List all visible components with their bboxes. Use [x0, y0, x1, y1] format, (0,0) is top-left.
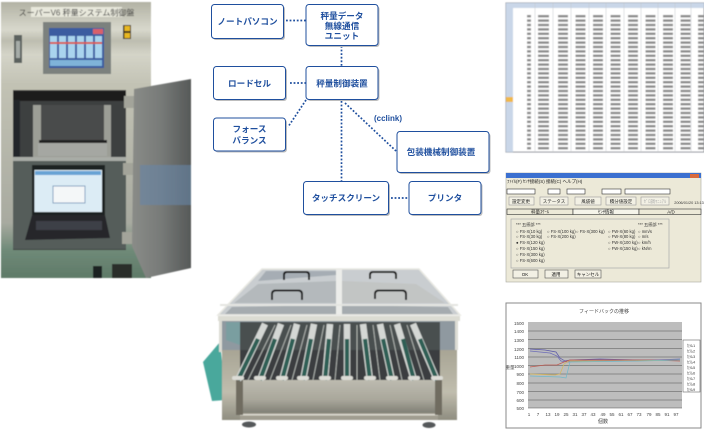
- chart legend: [683, 340, 700, 392]
- screenshot: settings window: A/D: [667, 210, 675, 215]
- cabinet switches: [93, 264, 132, 278]
- box: タッチスクリーン: [304, 182, 390, 216]
- screenshot: settings window: ｾﾝｻ情報: [598, 209, 614, 216]
- cabinet opening: [13, 90, 126, 250]
- screenshot: settings window: *** 五感部 ***: [638, 221, 663, 228]
- machine body: [222, 350, 457, 420]
- box: 秤量制御装置: [306, 66, 380, 101]
- screenshot: settings window: ○ km/h: [638, 240, 651, 245]
- chart plot area: [528, 322, 682, 408]
- window title bar: [506, 173, 701, 178]
- screenshot: settings window: ○ FW-X(60 kg): [608, 229, 636, 234]
- screenshot: settings window: ○ FS-X(600 kg): [516, 258, 545, 263]
- chart x axis labels: 73: [636, 412, 642, 417]
- chart legend: ｶﾗﾑ9: [687, 387, 696, 392]
- machine handles: [272, 272, 406, 300]
- window buttons: [509, 197, 669, 205]
- window tabs: [507, 209, 701, 214]
- connector lines: [286, 20, 409, 198]
- spreadsheet cells: [557, 14, 704, 151]
- chart x axis labels: [528, 412, 679, 417]
- chart: feedback trend: 重量: [506, 364, 515, 371]
- chart y axis labels: 1100: [514, 355, 524, 360]
- chart x axis labels: 7: [537, 412, 540, 417]
- screenshot: settings window: ○ FS-X(10 kg): [516, 229, 543, 234]
- chart y axis labels: 1200: [514, 347, 524, 352]
- screenshot: settings window: ○ m/s: [638, 234, 648, 239]
- photo: weighing machine: [203, 269, 460, 428]
- label: cclink: (cclink): [374, 114, 402, 123]
- screenshot: settings window: ○ kN/m: [638, 246, 652, 251]
- screenshot: settings window: ステータス: [543, 198, 566, 205]
- chart y axis labels: 800: [516, 381, 524, 386]
- screenshot: settings window: 秤量ｽｹｰﾙ: [531, 209, 550, 216]
- screenshot: settings window: 設定変更: [512, 198, 530, 205]
- chart: feedback trend: [506, 303, 701, 428]
- spreadsheet header: [506, 3, 704, 8]
- chart y axis labels: 600: [516, 398, 524, 403]
- chart legend: ｶﾗﾑ8: [687, 382, 696, 386]
- photo: control cabinet: [1, 2, 191, 278]
- box: 包装機械制御装置: 包装機械制御装置: [407, 146, 476, 157]
- box: ノートパソコン: [212, 4, 285, 40]
- chart legend: ｶﾗﾑ5: [687, 365, 696, 370]
- chart y axis labels: 500: [516, 406, 524, 411]
- box: ノートパソコン: ノートパソコン: [217, 16, 278, 26]
- screenshot: settings window: キャンセル: [577, 272, 600, 277]
- screenshot: settings window: ○ FS-X(30 kg): [516, 234, 543, 239]
- chart x axis labels: 19: [554, 412, 560, 417]
- chart legend: ｶﾗﾑ6: [687, 370, 696, 376]
- chart y axis labels: 1000: [514, 364, 524, 369]
- chart x axis labels: 49: [600, 412, 606, 417]
- screenshot: settings window: ○ FW-X(100 kg): [608, 240, 638, 245]
- box: 秤量制御装置: 秤量制御装置: [316, 78, 368, 88]
- door hinges: [122, 96, 136, 244]
- box: フォースバランス: [214, 118, 287, 152]
- screenshot: settings window: 風袋値: [581, 198, 595, 205]
- cabinet touch panel: [43, 22, 111, 74]
- box: 秤量データ無線通信ユニット: 無線通信: [325, 20, 360, 31]
- box: フォースバランス: フォース: [233, 124, 266, 134]
- chart x axis labels: 37: [581, 412, 587, 417]
- chart y axis labels: 900: [516, 372, 524, 377]
- machine glass cover: [218, 269, 460, 352]
- window group box: [511, 219, 669, 268]
- window bottom buttons: [513, 270, 601, 278]
- box: プリンタ: プリンタ: [428, 192, 462, 203]
- box: ロードセル: ロードセル: [228, 78, 271, 88]
- chart x axis labels: 97: [673, 412, 679, 417]
- chart x axis labels: 13: [545, 412, 551, 417]
- chart data lines: [530, 349, 680, 378]
- chart x axis labels: 79: [646, 412, 652, 417]
- box: 秤量データ無線通信ユニット: ユニット: [325, 31, 359, 41]
- screenshot: settings window: OK: [522, 272, 528, 277]
- chart title: フィードバックの推移: [579, 308, 629, 315]
- box: 包装機械制御装置: [397, 132, 490, 174]
- chart legend: ｶﾗﾑ7: [687, 376, 696, 381]
- screenshot: settings window: 2006/01/20 13:13: [674, 201, 704, 205]
- chart x axis labels: 55: [609, 412, 615, 417]
- box: フォースバランス: バランス: [232, 136, 267, 146]
- cabinet body: [1, 2, 151, 278]
- box: ロードセル: [214, 66, 287, 101]
- chart x axis labels: 25: [563, 412, 569, 417]
- screenshot: settings window: ○ FS-X(300 kg): [576, 229, 605, 234]
- machine conveyor ends: [232, 376, 443, 380]
- chart x axis labels: 1: [528, 412, 531, 417]
- chart axis titles: 個数: [598, 418, 608, 425]
- box: タッチスクリーン: タッチスクリーン: [312, 192, 381, 203]
- screenshot: spreadsheet: [506, 3, 704, 152]
- cabinet door: [132, 79, 191, 278]
- chart y axis labels: 1400: [514, 329, 524, 334]
- chart legend: ｶﾗﾑ1: [687, 343, 696, 348]
- cabinet lamps: [123, 25, 131, 39]
- screenshot: settings window: [506, 173, 704, 282]
- chart x axis labels: 67: [627, 412, 633, 417]
- screenshot: settings window: ○ FS-X(150 kg): [516, 246, 545, 251]
- chart x axis labels: 31: [572, 412, 578, 417]
- screenshot: settings window: 積分値設定: [610, 198, 633, 205]
- screenshot: settings window: ○ FW-X(80 kg): [608, 234, 636, 239]
- printer: [38, 105, 107, 156]
- chart y axis labels: 1300: [514, 338, 524, 343]
- chart x axis labels: 85: [655, 412, 661, 417]
- screenshot: settings window: ○ FW-X(150 kg): [608, 246, 638, 251]
- chart y axis labels: [514, 321, 524, 411]
- screenshot: settings window: ○ mm/s: [638, 229, 652, 234]
- chart x axis labels: 91: [664, 412, 670, 417]
- system diagram: [212, 4, 490, 216]
- chart legend: ｶﾗﾑ4: [687, 360, 696, 364]
- box: プリンタ: [409, 182, 482, 216]
- machine conveyors: [238, 324, 437, 380]
- chart y axis labels: 700: [516, 390, 524, 395]
- screenshot: settings window: ｾﾞﾛ調ﾏﾆｭｱﾙ: [644, 198, 667, 205]
- chart x axis labels: 43: [590, 412, 596, 417]
- box: 秤量データ無線通信ユニット: 秤量データ: [321, 10, 363, 21]
- screenshot: settings window: ○ FS-X(300 kg): [516, 252, 545, 257]
- chart y axis labels: 1500: [514, 321, 524, 326]
- screenshot: settings window: 適用: [552, 271, 560, 278]
- chart legend: ｶﾗﾑ3: [687, 354, 696, 359]
- window menu: ﾌｧｲﾙ(F) ｾﾝｻ接続(S) 接続(C) ヘルプ(H): [507, 178, 583, 185]
- screenshot: settings window: ● FS-X(120 kg): [516, 240, 545, 245]
- cabinet label plate: スーパーV6 秤量システム制御盤: [19, 8, 134, 18]
- laptop: [25, 165, 110, 240]
- screenshot: settings window: ○ FS-X(200 kg): [547, 234, 576, 239]
- screenshot: settings window: ○ FS-X(100 kg): [547, 229, 576, 234]
- cabinet handle: [14, 35, 22, 63]
- box: 秤量データ無線通信ユニット: [306, 4, 380, 47]
- chart grid lines: [528, 331, 682, 408]
- window input fields: [507, 189, 670, 194]
- machine wheels: [242, 422, 436, 428]
- chart x axis labels: 61: [618, 412, 624, 417]
- machine side box: [203, 342, 226, 401]
- chart legend: ｶﾗﾑ2: [687, 348, 696, 354]
- screenshot: settings window: *** 五感部 ***: [516, 221, 541, 228]
